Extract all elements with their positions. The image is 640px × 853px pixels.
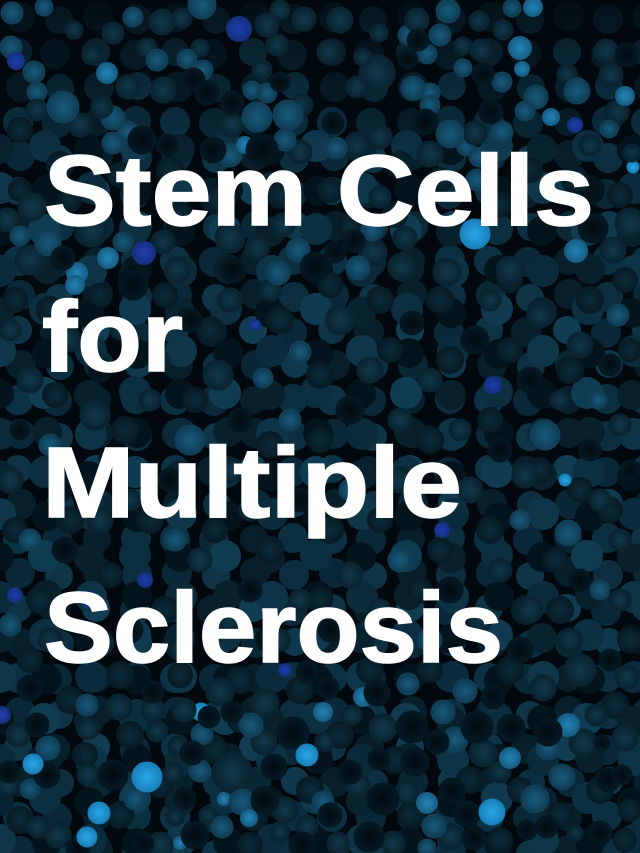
title line 3: Multiple [42,427,462,539]
title line 2: for [42,281,183,393]
title line 4: Sclerosis [44,572,503,684]
title: Stem Cells for Multiple Sclerosis [42,135,594,684]
title line 1: Stem Cells [44,135,594,247]
